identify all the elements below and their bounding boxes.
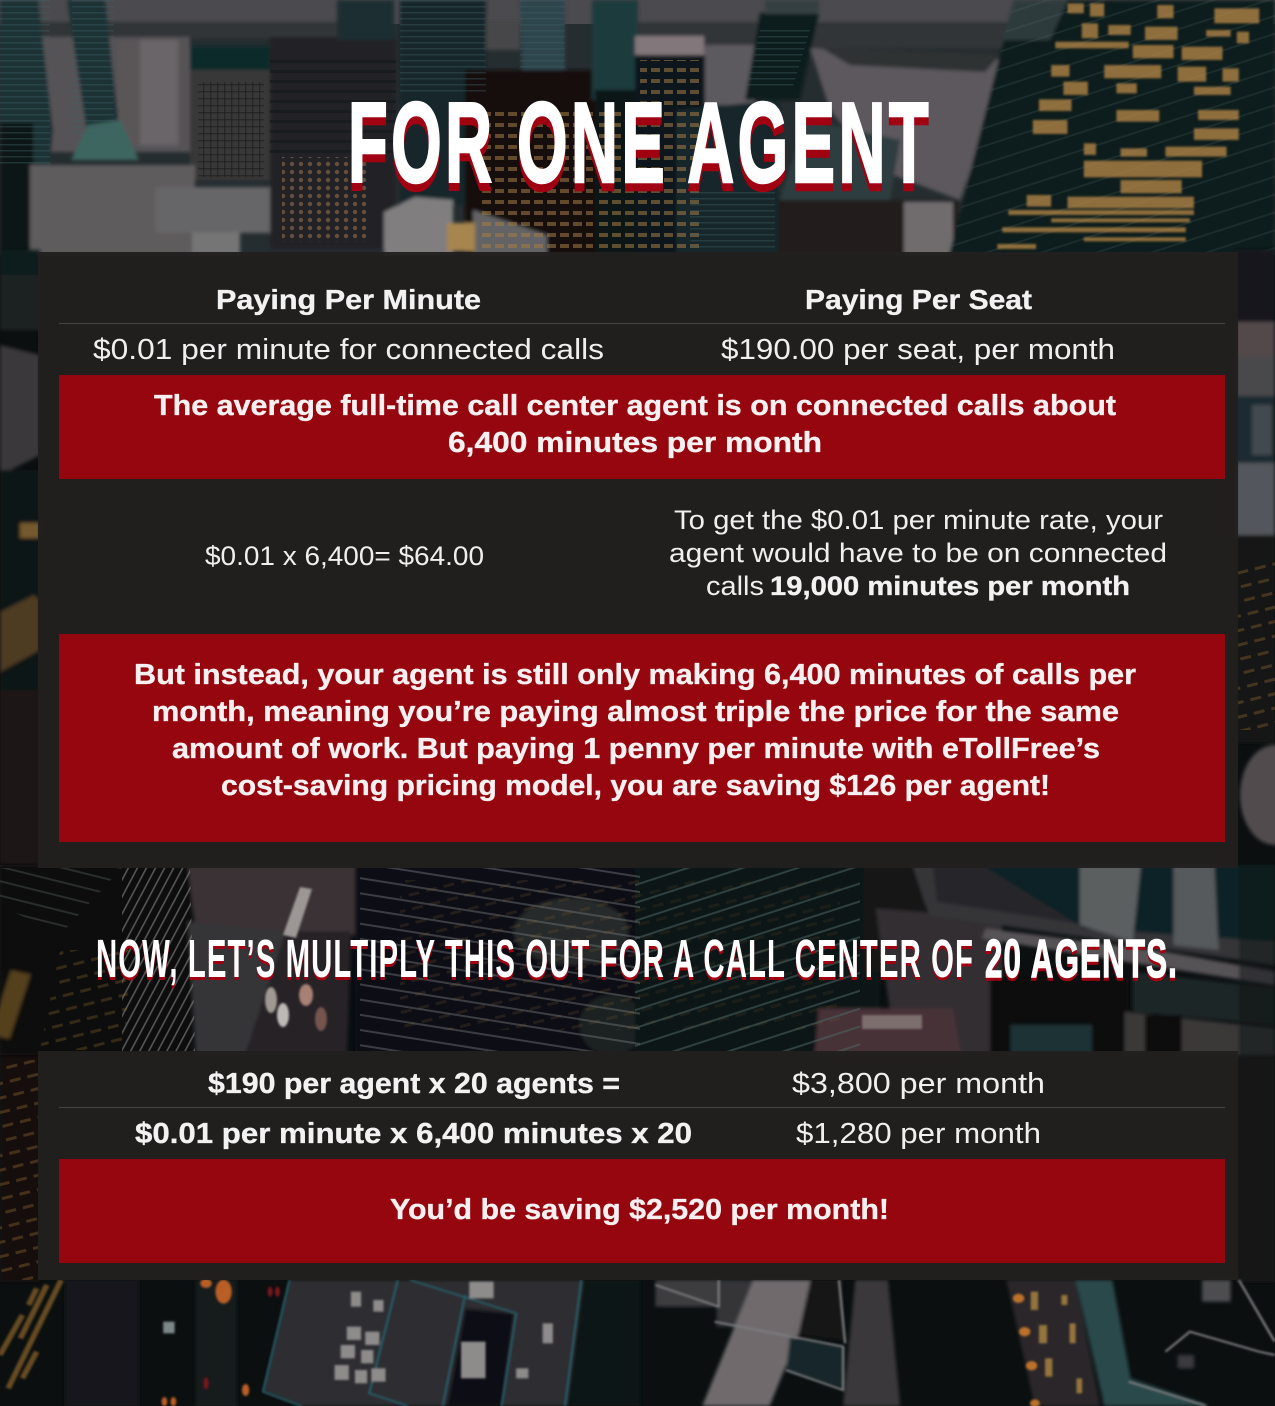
heading: paying per minute: Paying Per Minute [216,284,481,315]
callout: average minutes [59,375,1225,479]
per minute formula: $0.01 per minute x 6,400 minutes x 20 [135,1118,692,1150]
callout: monthly savings: You’d be saving $2,520 per month! [390,1194,889,1226]
text block: per seat equivalent: agent would have to be on connected [669,538,1167,568]
callout: savings explanation: cost-saving pricing model, you are saving $126 per agent! [221,770,1050,802]
heading: paying per seat: Paying Per Seat [805,284,1032,315]
calculation: per minute cost: $0.01 x 6,400= $64.00 [205,541,484,571]
per seat total: $3,800 per month [792,1068,1045,1100]
callout: savings explanation: month, meaning you’re paying almost triple the price for the same [152,696,1119,728]
callout: savings explanation [59,634,1225,842]
callout: savings explanation: But instead, your agent is still only making 6,400 minutes of calls per [134,659,1136,691]
per minute rate: $0.01 per minute for connected calls [93,334,604,366]
callout: average minutes: The average full-time call center agent is on connected calls about [154,390,1116,422]
text block: per seat equivalent: calls [706,571,764,601]
callout: average minutes: 6,400 minutes per month [448,427,822,459]
text block: per seat equivalent: To get the $0.01 per minute rate, your [674,505,1163,535]
panel: one agent comparison [38,252,1238,868]
panel: twenty agent comparison [38,1051,1238,1280]
callout: savings explanation: amount of work. But paying 1 penny per minute with eTollFree’s [172,733,1100,765]
per seat rate: $190.00 per seat, per month [721,334,1115,366]
text block: per seat equivalent: 19,000 minutes per month [770,571,1130,601]
per minute total: $1,280 per month [796,1118,1041,1150]
text block: per seat equivalent [669,505,1167,601]
callout: monthly savings [59,1159,1225,1263]
per seat formula: $190 per agent x 20 agents = [208,1068,620,1100]
